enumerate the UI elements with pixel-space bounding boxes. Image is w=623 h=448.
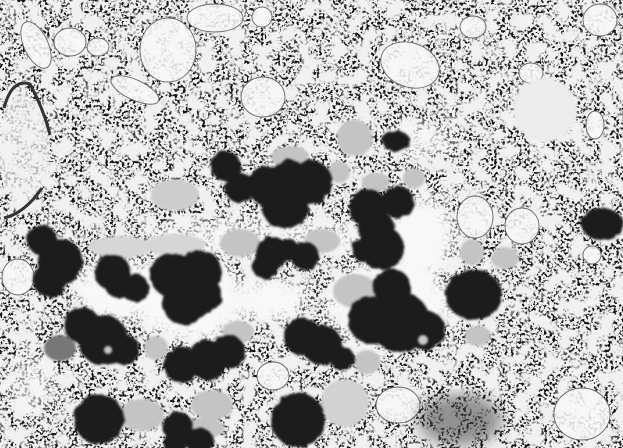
dense body: central large cluster: [211, 151, 332, 229]
dense body: upper right cluster: [349, 186, 414, 270]
dense body: bottom small: [163, 412, 214, 448]
large vacuole with dark membrane arc at left: [0, 83, 50, 218]
small pale inclusions on dense bodies: [104, 335, 428, 354]
dense body: right edge: [581, 208, 623, 240]
dense body: bottom mid: [271, 393, 325, 447]
dense patch at bottom: [418, 394, 502, 446]
dense body: lower right cluster: [348, 269, 445, 352]
dense body: centre small: [252, 236, 319, 279]
dense body: far left: [27, 225, 83, 297]
dense body: top small: [382, 131, 410, 151]
dense body: lower left: [64, 307, 140, 365]
dense body: left of centre: [94, 254, 149, 302]
dense body: lower mid: [284, 318, 354, 370]
dense dark bodies: [27, 131, 623, 448]
dense body: round right: [446, 270, 502, 320]
dense body: bottom left: [74, 394, 124, 444]
grey lysosome-like vesicles: [44, 78, 577, 438]
dense body: lower centre: [164, 335, 245, 383]
cleared pale zones around dense bodies: [8, 122, 454, 415]
dense body: centre: [150, 250, 222, 325]
